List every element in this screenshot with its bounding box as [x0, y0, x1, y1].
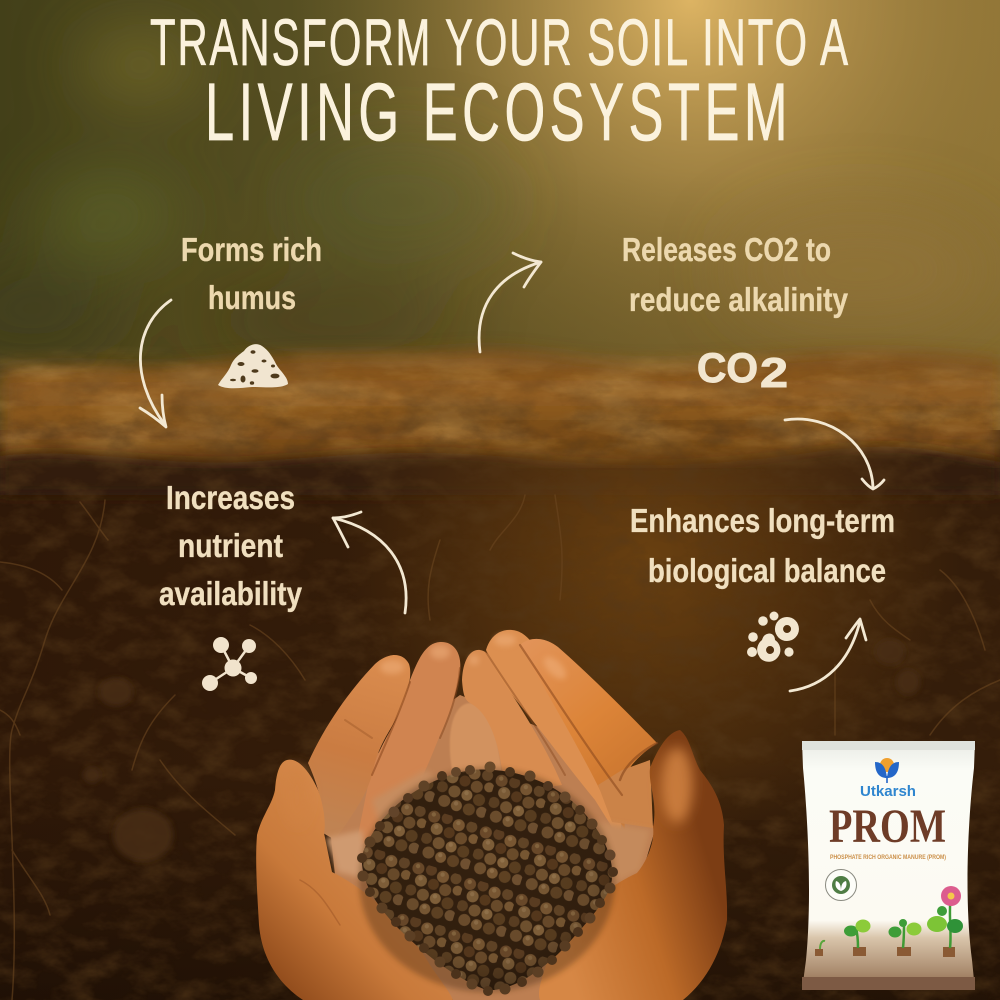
label: enhances biological balance: biological balance [648, 552, 886, 589]
thumb highlights [285, 747, 693, 825]
bag subtitle: PHOSPHATE RICH ORGANIC MANURE (PROM) [830, 854, 946, 861]
icon: CO2: 2 [760, 349, 788, 396]
finger highlights [380, 634, 570, 683]
arrow: balance loop to nutrients [333, 512, 406, 613]
palm base [326, 695, 655, 1000]
icon: molecule [202, 637, 257, 691]
label: enhances biological balance [630, 502, 895, 589]
soil clods [83, 639, 920, 861]
label: increases nutrient availability: nutrient [178, 527, 283, 564]
arrow: hands to balance [790, 619, 866, 691]
bag logo [875, 758, 899, 783]
label: releases CO2: Releases CO2 to [622, 231, 831, 268]
icon: CO2 [697, 344, 788, 396]
label: forms rich humus: Forms rich [181, 231, 322, 268]
granule pile [357, 762, 618, 996]
bag organic badge [826, 870, 856, 900]
palm hollows [326, 830, 370, 880]
label: increases nutrient availability: Increases [166, 479, 295, 516]
left hand heel and thumb [256, 760, 453, 1000]
arrow: hands up to CO2 label [479, 253, 541, 352]
arrow: CO2 to balance [785, 419, 884, 489]
bag flowering plant [927, 886, 963, 957]
icon: microbes [747, 612, 799, 662]
bag product name: PROM [829, 800, 946, 853]
creases [300, 645, 657, 925]
title [150, 5, 850, 158]
bag seedling 1 [815, 941, 825, 956]
right hand fingers [462, 650, 562, 790]
label: increases nutrient availability: availability [159, 575, 303, 612]
decorative roots [0, 495, 1000, 1000]
label: forms rich humus: humus [208, 279, 296, 316]
label: increases nutrient availability [159, 479, 303, 612]
icon: CO2: CO [697, 344, 758, 391]
granule edge [357, 762, 618, 996]
icon: humus pile [218, 344, 288, 388]
bag brand: Utkarsh [860, 783, 916, 800]
label: releases CO2 [622, 231, 849, 318]
left hand fingers [355, 642, 460, 850]
bag seedling 2 [844, 920, 870, 956]
right hand heel and thumb [539, 730, 727, 1000]
centre inner finger [450, 703, 502, 775]
arrow: humus to nutrients [140, 300, 171, 427]
label: releases CO2: reduce alkalinity [629, 281, 849, 318]
label: enhances biological balance: Enhances long-term [630, 502, 895, 539]
bag seedling 3 [888, 919, 922, 956]
label: forms rich humus [181, 231, 322, 316]
illustration: cupped hands holding granules [256, 630, 727, 1000]
product bag: Utkarsh PROM [802, 741, 975, 990]
pile contact shadow [359, 768, 615, 992]
